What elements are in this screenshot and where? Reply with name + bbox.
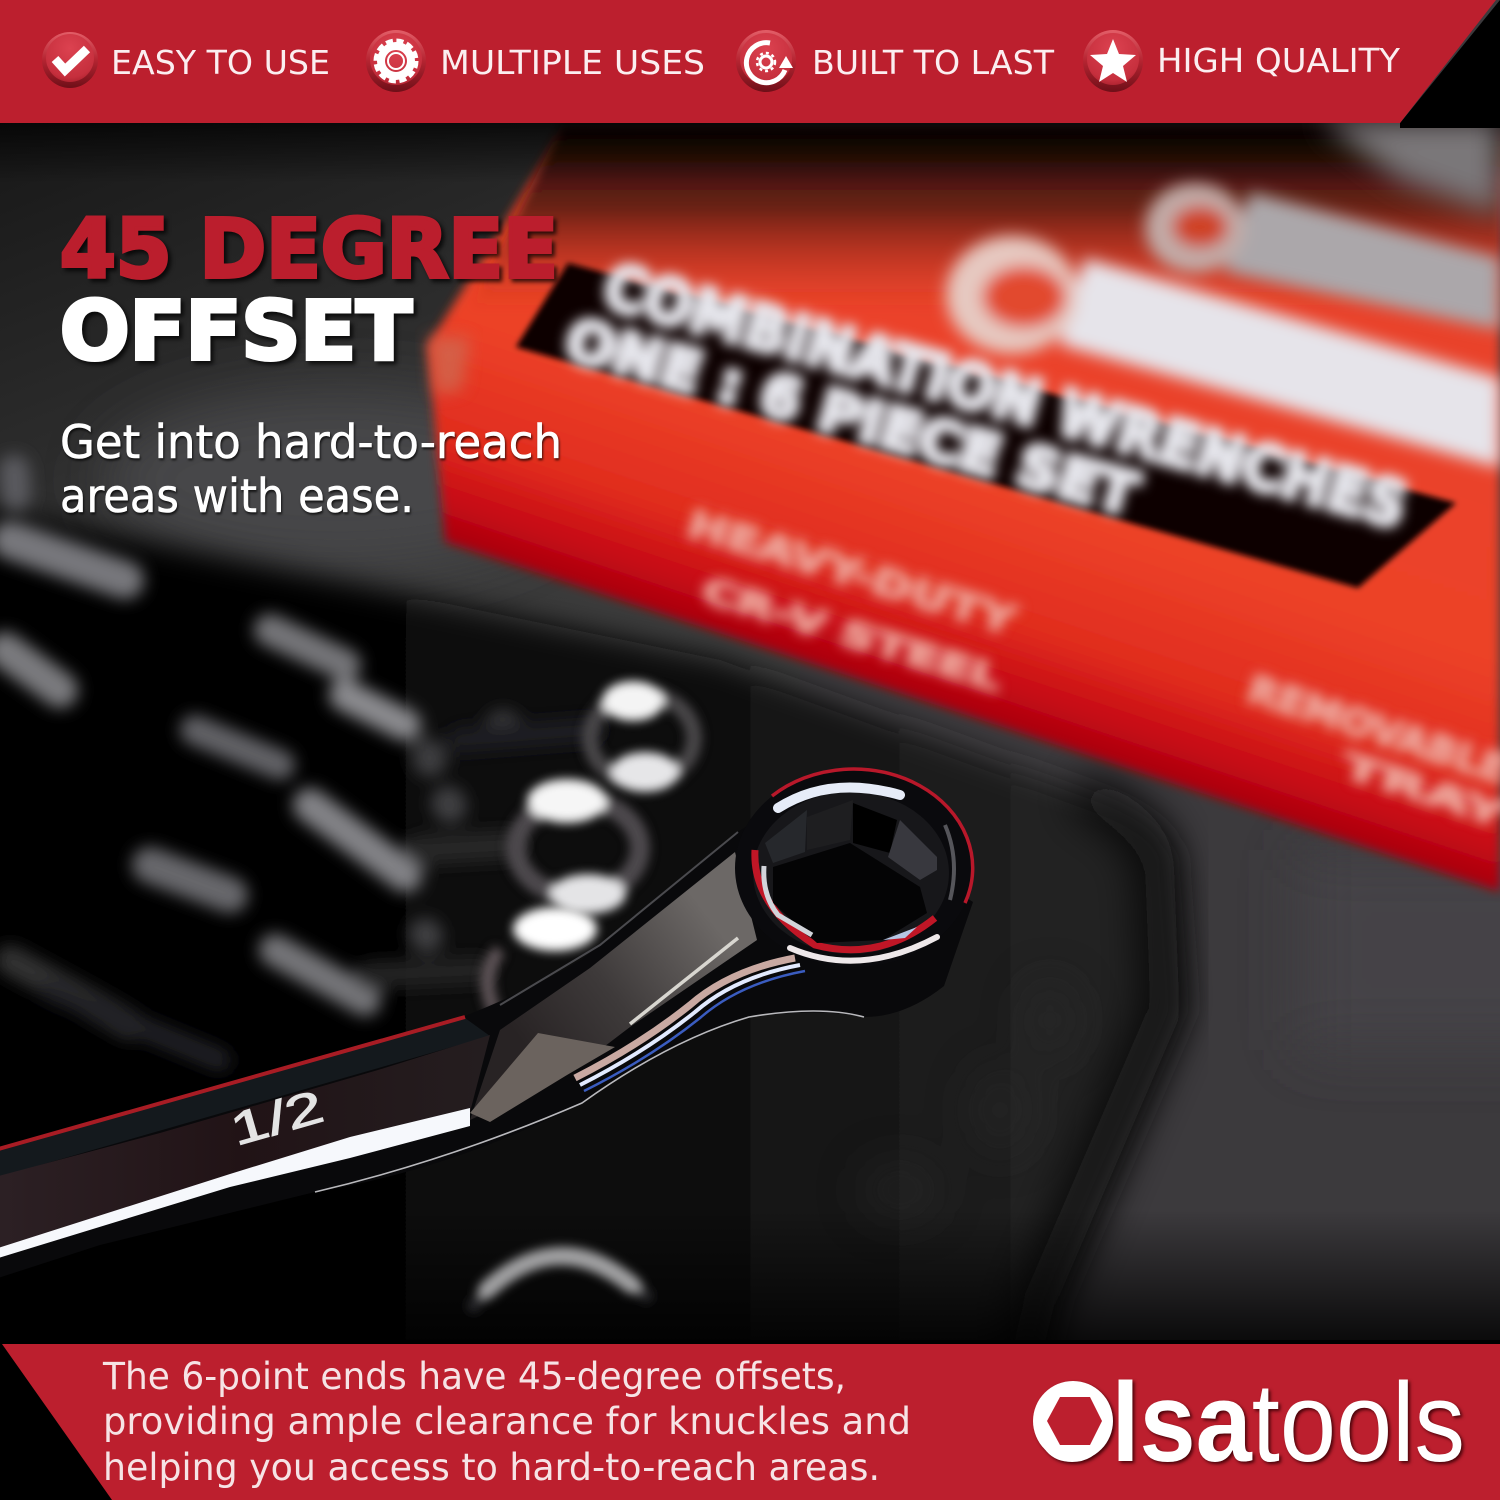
photo: blurred wrenches in tray <box>5 470 694 1310</box>
box artwork: grey top-right panel <box>1320 120 1500 215</box>
blurred socket ring: lower <box>488 907 597 1012</box>
wrench neck <box>470 852 757 1120</box>
blurred wrench end at the bottom <box>470 1252 650 1310</box>
headline: 45 DEGREE <box>60 203 558 297</box>
wrench head inner red rim <box>755 850 935 950</box>
feature: easy to use <box>42 32 330 88</box>
headline: OFFSET <box>60 285 412 379</box>
subheading: Get into hard-to-reach <box>60 415 562 469</box>
box artwork: blurred small captions: REMOVABLE <box>1242 667 1500 792</box>
box artwork: blurred small captions <box>682 502 1500 836</box>
feature: multiple uses <box>366 30 705 92</box>
photo: black foam tray <box>0 500 1185 1380</box>
description text: The 6-point ends have 45-degree offsets, <box>102 1355 846 1398</box>
feature: easy to use: EASY TO USE <box>111 43 330 82</box>
neck chrome reflections <box>575 958 795 1078</box>
description text: helping you access to hard-to-reach areas. <box>103 1446 880 1489</box>
wrench shaft face <box>0 1035 490 1252</box>
photo: blurred red product box <box>428 125 1500 892</box>
blurred stamped markings on wrenches <box>5 470 590 1060</box>
wrench head ring <box>735 769 973 967</box>
feature: high quality: HIGH QUALITY <box>1157 41 1401 80</box>
wrench shaft dark band <box>0 1018 490 1178</box>
icon: gear <box>366 30 426 92</box>
wrench body silhouette <box>0 790 973 1279</box>
subheading: areas with ease. <box>60 469 414 523</box>
box artwork: blurred white wrench picture <box>946 183 1500 468</box>
box artwork: blurred small captions: CR-V STEEL <box>697 570 1006 699</box>
feature: high quality <box>1083 30 1401 92</box>
box artwork: blurred small captions: HEAVY-DUTY <box>682 502 1021 643</box>
box artwork: blurred product name: COMBINATION WRENCHES <box>596 249 1415 543</box>
logo: Olsatools <box>1033 1360 1465 1485</box>
box artwork: blurred product name: ONE : 6 PIECE SET <box>558 305 1145 529</box>
top banner <box>0 0 1500 128</box>
subheading <box>60 415 562 523</box>
wrench head inner hexagon opening <box>773 843 927 943</box>
box artwork: black label band <box>516 263 1456 588</box>
bottom banner <box>0 1340 1500 1500</box>
blurred socket ring: top <box>590 681 694 792</box>
description text: providing ample clearance for knuckles and <box>103 1400 911 1443</box>
headline <box>60 203 558 379</box>
box artwork: blurred small captions: TRAY <box>1337 746 1500 836</box>
description text <box>102 1355 911 1489</box>
icon: star <box>1083 30 1143 92</box>
blurred socket ring: middle <box>516 779 640 914</box>
feature: multiple uses: MULTIPLE USES <box>440 43 705 82</box>
feature: built to last <box>736 30 1055 92</box>
main wrench, sharp in the foreground <box>0 769 973 1279</box>
wrench bright highlight <box>0 1108 470 1259</box>
icon: gear with circular arrow <box>736 30 796 92</box>
icon: check mark <box>42 32 98 88</box>
wrench stamped size: 1/2 <box>224 1080 329 1156</box>
feature: built to last: BUILT TO LAST <box>812 43 1055 82</box>
wrench red reflection along top edge <box>0 1017 465 1150</box>
